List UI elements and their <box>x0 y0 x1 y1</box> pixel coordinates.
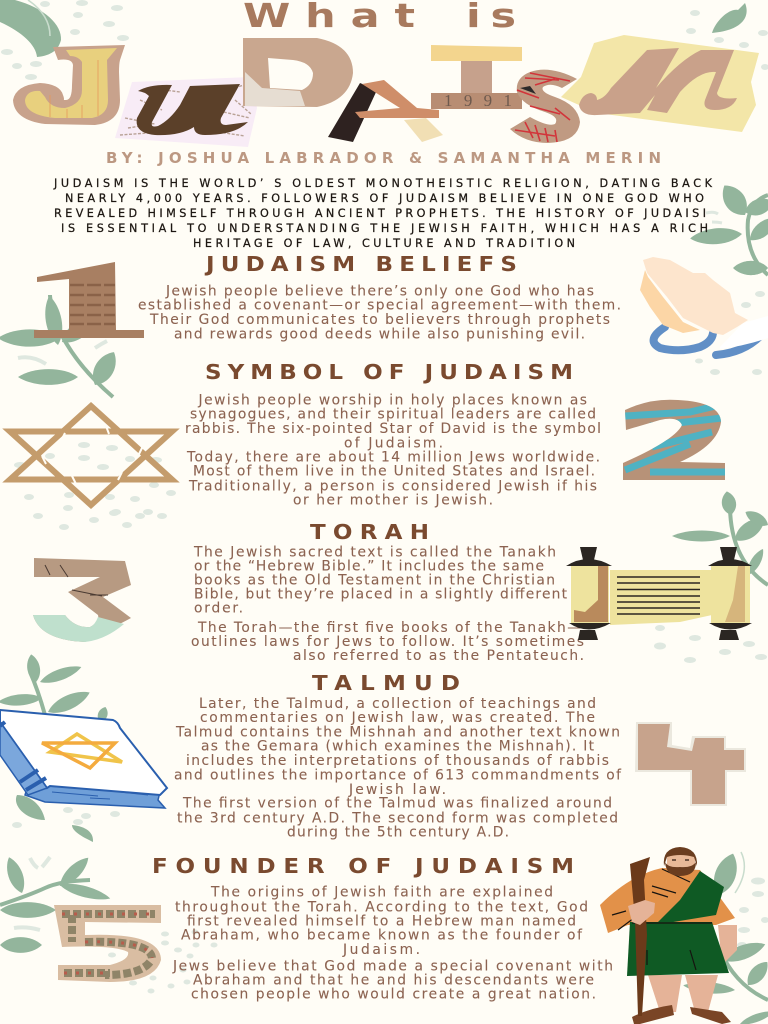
text: beliefs body: established a covenant—or special agreement—with them. <box>138 298 621 314</box>
number 3 <box>33 558 131 642</box>
letter D <box>243 38 353 107</box>
heading: beliefs: JUDAISM BELIEFS <box>204 253 517 277</box>
text: talmud body: during the 5th century A.D. <box>287 824 509 840</box>
leaf sprig: bottom right <box>683 850 768 1024</box>
letter S <box>510 70 580 143</box>
text: beliefs body <box>138 284 621 342</box>
text: talmud body: Later, the Talmud, a collection of teachings and <box>199 696 596 712</box>
panel: symbol <box>185 361 601 508</box>
leaf: top left <box>0 0 61 57</box>
panel: founder <box>152 855 613 1002</box>
intro paragraph: IS ESSENTIAL TO UNDERSTANDING THE JEWISH FAITH, WHICH HAS A RICH <box>61 222 708 235</box>
intro paragraph: JUDAISM IS THE WORLD’ S OLDEST MONOTHEISTIC RELIGION, DATING BACK <box>53 177 713 190</box>
text: symbol body: or her mother is Jewish. <box>293 492 493 508</box>
heading: founder: FOUNDER OF JUDAISM <box>152 855 574 879</box>
small leaves below book <box>16 795 93 842</box>
text: founder body: Judaism. <box>342 942 420 958</box>
panel: beliefs <box>138 253 621 342</box>
text: torah body: order. <box>194 600 243 616</box>
leaf sprig: right upper <box>690 180 768 275</box>
letter I: 1991 <box>444 91 512 110</box>
leaf sprig: left lower <box>0 653 110 724</box>
icon: torah scroll <box>566 547 752 640</box>
text: talmud body: Talmud contains the Mishnah and another text known <box>175 724 620 740</box>
text: symbol body: of Judaism. <box>344 436 443 452</box>
title: What is <box>243 0 516 36</box>
text: beliefs body: Their God communicates to believers through prophets <box>149 312 610 328</box>
text: talmud body: The first version of the Talmud was finalized around <box>182 796 612 812</box>
heading: torah: TORAH <box>310 521 429 545</box>
text: founder body: chosen people who would create a great nation. <box>191 986 596 1002</box>
text: symbol body: Traditionally, a person is considered Jewish if his <box>188 478 597 494</box>
number 4 <box>635 722 746 806</box>
text: symbol body: rabbis. The six-pointed Star of David is the symbol <box>185 421 601 437</box>
icon: star of David <box>10 406 172 505</box>
text: symbol body: Today, there are about 14 million Jews worldwide. <box>186 450 600 466</box>
leaf: upper right edge <box>735 261 768 275</box>
intro paragraph <box>53 177 713 250</box>
text: talmud body: as the Gemara (which examines the Mishnah). It <box>201 738 595 754</box>
text: founder body: Abraham and that he and his descendants were <box>193 972 594 988</box>
title art: JUDAISM collage letters <box>13 35 759 147</box>
text: symbol body: synagogues, and their spiritual leaders are called <box>190 406 596 422</box>
text: talmud body: commentaries on Jewish law, was created. The <box>200 710 595 726</box>
text: talmud body: the 3rd century A.D. The second form was completed <box>177 810 618 826</box>
heading: symbol: SYMBOL OF JUDAISM <box>205 361 573 385</box>
text: torah body <box>191 544 584 664</box>
text: founder body: throughout the Torah. According to the text, God <box>175 900 588 916</box>
heading: talmud: TALMUD <box>312 672 460 696</box>
icon: book with star <box>0 710 167 808</box>
text: torah body: Bible, but they’re placed in a slightly different <box>194 586 568 602</box>
text: founder body: Abraham, who became known as the founder of <box>181 928 583 944</box>
text: beliefs body: and rewards good deeds while also punishing evil. <box>174 326 585 342</box>
panel: torah <box>191 521 584 664</box>
text: torah body: The Torah—the first five books of the Tanakh— <box>197 620 581 636</box>
letter I <box>431 45 522 110</box>
text: founder body: Jews believe that God made a special covenant with <box>172 958 613 974</box>
text: founder body <box>172 884 613 1002</box>
leaf sprig: left upper <box>0 294 122 397</box>
text: torah body: also referred to as the Pentateuch. <box>293 648 584 664</box>
text: beliefs body: Jewish people believe there’s only one God who has <box>165 284 594 300</box>
letter U on pink paper <box>115 77 257 147</box>
intro paragraph: NEARLY 4,000 YEARS. FOLLOWERS OF JUDAISM BELIEVE IN ONE GOD WHO <box>65 192 704 205</box>
text: talmud body: includes the interpretations of thousands of rabbis <box>186 753 609 769</box>
text: talmud body: and outlines the importance of 613 commandments of <box>174 768 622 784</box>
text: symbol body: Jewish people worship in holy places known as <box>198 392 587 408</box>
byline: BY: JOSHUA LABRADOR & SAMANTHA MERIN <box>106 149 661 167</box>
text: symbol body <box>185 392 601 508</box>
text: torah body: The Jewish sacred text is called the Tanakh <box>193 544 556 560</box>
text: talmud body <box>174 696 622 840</box>
letter A <box>328 80 443 142</box>
text: torah body: or the “Hebrew Bible.” It includes the same <box>194 558 544 574</box>
letter J <box>13 45 125 125</box>
icon: Abraham figure <box>600 847 737 1024</box>
number 5 <box>54 905 161 982</box>
text: torah body: books as the Old Testament in the Christian <box>194 572 555 588</box>
letter M on yellow paper <box>561 35 759 132</box>
leaf: top right <box>712 3 747 33</box>
icon: praying hands <box>640 257 768 355</box>
number 2 <box>623 400 726 480</box>
leaf sprig: right middle <box>672 490 768 585</box>
text: talmud body: Jewish law. <box>348 782 446 798</box>
panel: talmud <box>174 672 622 840</box>
leaf sprig: bottom left <box>0 853 112 953</box>
text: torah body: outlines laws for Jews to follow. It’s sometimes <box>191 634 584 650</box>
text: symbol body: Most of them live in the United States and Israel. <box>193 464 595 480</box>
text: founder body: The origins of Jewish faith are explained <box>210 884 553 900</box>
number 1 <box>34 262 144 338</box>
text: founder body: first revealed himself to a Hebrew man named <box>187 914 576 930</box>
intro paragraph: REVEALED HIMSELF THROUGH ANCIENT PROPHETS. THE HISTORY OF JUDAISI <box>54 207 706 220</box>
intro paragraph: HERITAGE OF LAW, CULTURE AND TRADITION <box>193 237 575 250</box>
